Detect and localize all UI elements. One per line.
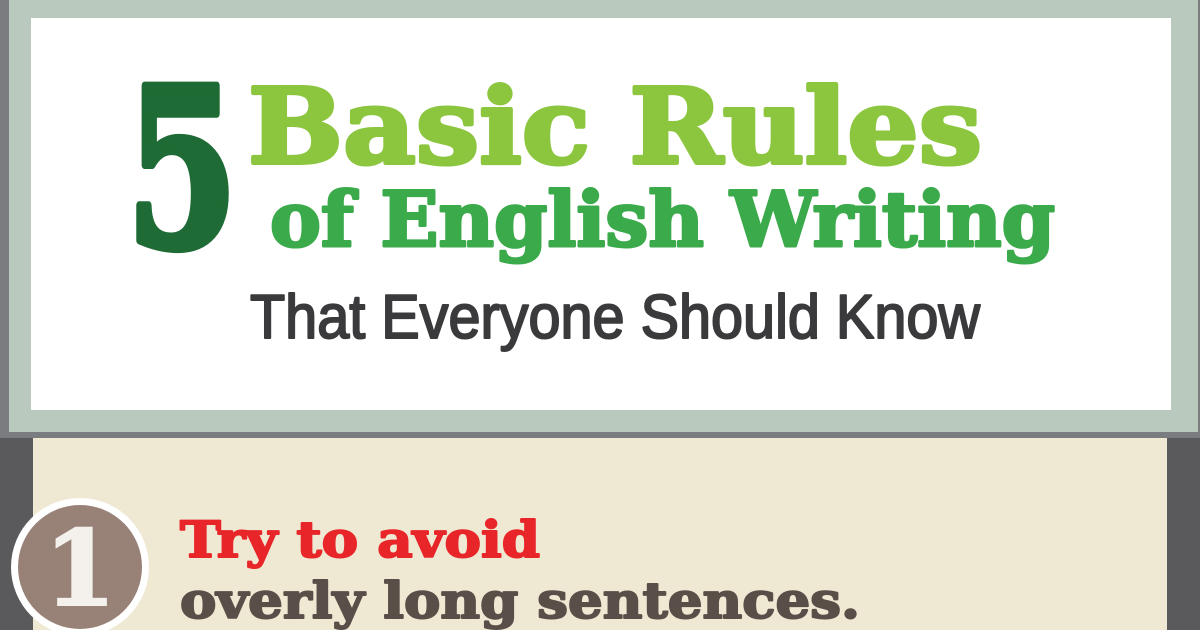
heading: rule 1	[180, 510, 860, 630]
subtitle: That Everyone Should Know	[250, 283, 980, 352]
panel: header frame	[0, 0, 1200, 438]
heading: rule 1: overly long sentences.	[180, 571, 860, 630]
icon: number 1 badge: 1	[44, 507, 116, 630]
icon: number 1 badge	[11, 498, 149, 630]
heading: rule 1: Try to avoid	[180, 510, 540, 569]
title: of English Writing: of English Writing	[270, 175, 1055, 264]
title: Basic Rules: Basic Rules	[248, 65, 982, 188]
panel: rule 1 beige section	[33, 438, 1167, 630]
panel: white title card	[31, 18, 1171, 410]
title: big number 5: 5	[126, 39, 238, 298]
